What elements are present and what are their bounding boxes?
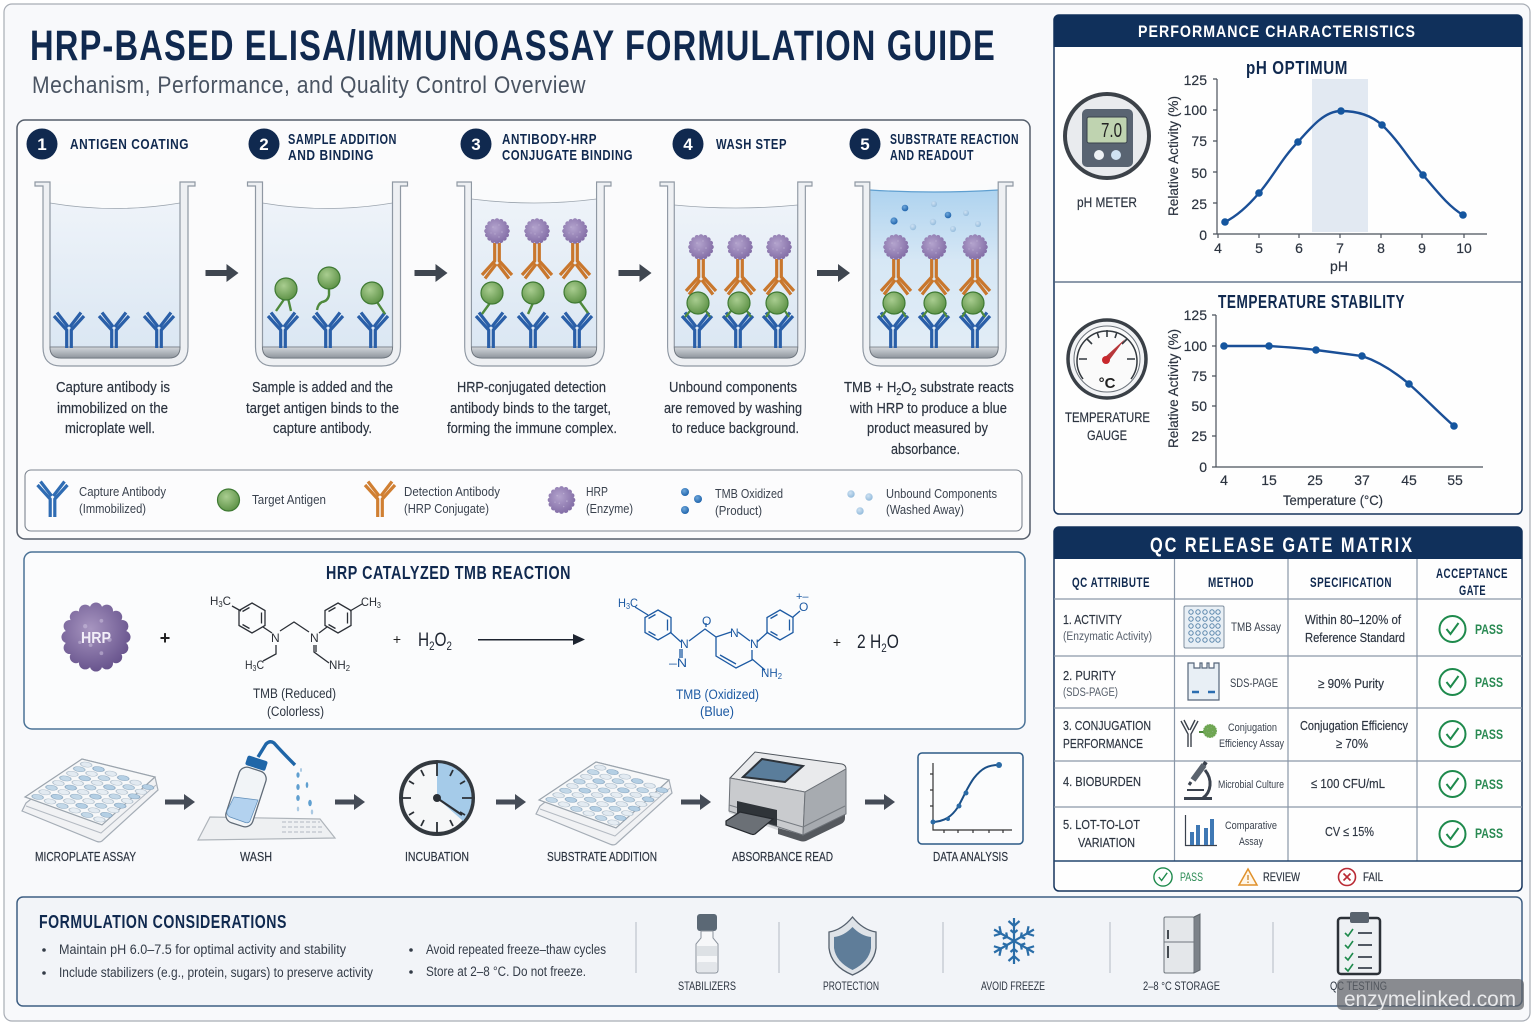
step 2 heading: 2 xyxy=(259,135,269,154)
row 2: purity: 2. PURITY xyxy=(1063,668,1116,683)
icon: stabilizers vial: STABILIZERS xyxy=(678,981,736,993)
panel: assay steps xyxy=(17,120,1030,539)
label: TMB reduced xyxy=(253,686,336,719)
chart: temperature stability: 75 xyxy=(1191,368,1207,384)
HRP enzyme: HRP xyxy=(81,630,111,647)
step 1 heading: 1 xyxy=(37,135,47,154)
chart: pH optimum: 100 xyxy=(1184,102,1207,118)
step 4 description: Unbound components xyxy=(669,379,797,396)
arrow xyxy=(335,794,365,810)
step 1 heading xyxy=(26,128,189,160)
row 1: activity: Reference Standard xyxy=(1305,630,1405,645)
step 1 description: immobilized on the xyxy=(57,400,168,417)
water product: 2 xyxy=(881,642,887,655)
icon: QC testing clipboard xyxy=(1330,912,1387,993)
workflow: data analysis chart xyxy=(918,753,1023,864)
molecule: TMB oxidized: –N xyxy=(669,656,687,670)
plus sign: + xyxy=(160,628,170,648)
column headers: SPECIFICATION xyxy=(1310,575,1392,590)
step 3 heading: CONJUGATE BINDING xyxy=(502,147,633,164)
row 5: lot-to-lot variation xyxy=(1063,815,1503,850)
step 5 heading xyxy=(850,128,1019,164)
icon: avoid freeze snowflake xyxy=(981,918,1045,993)
row 1: activity: TMB Assay xyxy=(1231,620,1281,634)
row 2: purity: SDS-PAGE xyxy=(1230,676,1278,690)
icon: pH meter: pH METER xyxy=(1077,194,1137,210)
row 1: activity: 1. ACTIVITY xyxy=(1063,612,1122,627)
plus sign: + xyxy=(833,634,841,650)
row 4: bioburden: PASS xyxy=(1475,777,1503,792)
molecule: TMB oxidized: N xyxy=(750,637,759,651)
icon: 2-8 C storage fridge xyxy=(1143,914,1220,993)
step 5 description: absorbance. xyxy=(891,441,960,458)
bullet list right: Avoid repeated freeze–thaw cycles xyxy=(426,942,606,957)
row 4: bioburden: 4. BIOBURDEN xyxy=(1063,774,1141,789)
formulation heading: FORMULATION CONSIDERATIONS xyxy=(39,912,287,932)
step 4 description: are removed by washing xyxy=(664,400,802,417)
column headers xyxy=(1072,566,1508,598)
legend: target antigen: Target Antigen xyxy=(252,493,326,507)
molecule: TMB oxidized: O xyxy=(702,614,711,628)
arrow: step 2 to 3 xyxy=(414,264,448,282)
step 2 description: Sample is added and the xyxy=(252,379,393,396)
arrow xyxy=(165,794,195,810)
bullet list left xyxy=(42,942,373,980)
well 5: substrate readout xyxy=(855,182,1013,366)
step 5 description xyxy=(844,378,1014,458)
icon: temperature gauge: TEMPERATURE xyxy=(1065,409,1150,425)
chart: temperature stability: Temperature (°C) xyxy=(1283,492,1383,508)
step 1 description: microplate well. xyxy=(65,420,155,437)
step 5 description: substrate reacts xyxy=(916,378,1014,395)
icon: pH meter xyxy=(1065,94,1149,210)
molecule: TMB reduced: 2 xyxy=(346,664,351,673)
legend: unbound components xyxy=(847,487,997,517)
icon: QC testing clipboard: QC TESTING xyxy=(1330,981,1387,993)
row 1: activity: Within 80–120% of xyxy=(1305,612,1401,627)
chart: temperature stability: 55 xyxy=(1447,472,1463,488)
column headers: METHOD xyxy=(1208,575,1254,590)
chart: pH optimum: 50 xyxy=(1191,165,1207,181)
workflow: incubation clock xyxy=(401,762,473,864)
molecule: TMB oxidized xyxy=(618,591,809,681)
label: TMB oxidized xyxy=(676,687,759,719)
chart: pH optimum: 25 xyxy=(1191,196,1207,212)
title: HRP-BASED ELISA/IMMUNOASSAY FORMULATION GUIDE xyxy=(30,22,996,70)
workflow: wash: WASH xyxy=(240,849,272,864)
reaction arrow xyxy=(478,634,585,645)
legend: HRP enzyme: HRP xyxy=(586,485,608,499)
legend: detection antibody xyxy=(365,482,501,517)
arrow: step 1 to 2 xyxy=(206,264,238,282)
row 3: conjugation performance: ≥ 70% xyxy=(1336,736,1368,751)
step 5 heading: SUBSTRATE REACTION xyxy=(890,131,1019,148)
workflow: absorbance plate reader xyxy=(726,752,846,864)
chart: temperature stability: TEMPERATURE STABILITY xyxy=(1218,292,1405,312)
molecule: TMB reduced: CH xyxy=(361,595,378,609)
hydrogen peroxide: 2 xyxy=(446,640,452,653)
arrow xyxy=(681,794,711,810)
chart: temperature stability: 25 xyxy=(1191,428,1207,444)
workflow: incubation clock: INCUBATION xyxy=(405,849,469,864)
water product: 2 H xyxy=(857,631,881,652)
bullet list right: Store at 2–8 °C. Do not freeze. xyxy=(426,964,586,979)
row 5: lot-to-lot variation: CV ≤ 15% xyxy=(1325,824,1374,839)
workflow: microplate assay: MICROPLATE ASSAY xyxy=(35,849,136,864)
step 2 heading: AND BINDING xyxy=(288,147,374,164)
legend: capture antibody: (Immobilized) xyxy=(79,502,146,516)
molecule: TMB oxidized: +– xyxy=(796,591,809,603)
row 3: conjugation performance: Efficiency Assay xyxy=(1219,738,1284,750)
chart: temperature stability: 125 xyxy=(1184,307,1207,323)
row 2: purity: PASS xyxy=(1475,675,1503,690)
molecule: TMB reduced: 3 xyxy=(253,664,257,673)
legend: HRP enzyme xyxy=(548,485,633,516)
step 2 heading: SAMPLE ADDITION xyxy=(288,131,397,148)
chart: pH optimum: 5 xyxy=(1255,240,1263,256)
step 3 heading: 3 xyxy=(471,135,481,154)
column headers: ACCEPTANCE xyxy=(1436,566,1508,581)
step 4 description: to reduce background. xyxy=(672,420,799,437)
column headers: QC ATTRIBUTE xyxy=(1072,575,1150,590)
molecule: TMB reduced: N xyxy=(310,631,319,645)
subtitle: Mechanism, Performance, and Quality Control Overview xyxy=(32,72,586,99)
molecule: TMB oxidized: N xyxy=(730,626,739,640)
row 5: lot-to-lot variation: VARIATION xyxy=(1078,835,1135,850)
row 3: conjugation performance: 3. CONJUGATION xyxy=(1063,718,1151,733)
icon: temperature gauge xyxy=(1065,320,1150,443)
molecule: TMB reduced: C xyxy=(256,658,264,672)
column headers: GATE xyxy=(1459,583,1486,598)
bullet list right xyxy=(409,942,606,979)
step 2 description: capture antibody. xyxy=(273,420,372,437)
step 3 heading: ANTIBODY-HRP xyxy=(502,131,597,148)
step 3 description xyxy=(447,379,617,437)
workflow: substrate addition: SUBSTRATE ADDITION xyxy=(547,849,657,864)
step 4 heading xyxy=(672,128,787,160)
chart: pH optimum: pH OPTIMUM xyxy=(1246,58,1348,78)
chart: pH optimum xyxy=(1166,58,1487,274)
legend: target antigen xyxy=(218,489,326,511)
molecule: TMB oxidized: H xyxy=(618,596,627,610)
row 5: lot-to-lot variation: 5. LOT-TO-LOT xyxy=(1063,817,1140,832)
watermark xyxy=(1337,979,1524,1011)
status legend: REVIEW xyxy=(1263,870,1301,884)
row 5: lot-to-lot variation: Assay xyxy=(1239,836,1263,848)
arrow: step 4 to 5 xyxy=(817,264,850,282)
row 3: conjugation performance: Conjugation Efficiency xyxy=(1300,718,1408,733)
legend: TMB oxidized: (Product) xyxy=(715,504,762,518)
legend: detection antibody: (HRP Conjugate) xyxy=(404,502,489,516)
panel header: PERFORMANCE CHARACTERISTICS xyxy=(1138,22,1416,41)
molecule: TMB oxidized: O xyxy=(799,600,808,614)
row 4: bioburden xyxy=(1063,762,1503,798)
chart: pH optimum: 9 xyxy=(1418,240,1426,256)
molecule: TMB reduced: H xyxy=(245,658,254,672)
well 1: antigen coating xyxy=(35,182,195,366)
chart: temperature stability: 100 xyxy=(1184,338,1207,354)
reaction heading: HRP CATALYZED TMB REACTION xyxy=(326,563,571,583)
row 5: lot-to-lot variation: Comparative xyxy=(1225,820,1277,832)
hydrogen peroxide: O xyxy=(435,628,446,650)
step 4 description xyxy=(664,379,802,437)
hydrogen peroxide: 2 xyxy=(429,640,435,653)
chart: pH optimum: 8 xyxy=(1377,240,1385,256)
workflow: substrate addition xyxy=(536,762,672,864)
step 3 heading xyxy=(460,128,633,164)
chart: temperature stability: 4 xyxy=(1220,472,1228,488)
panel: formulation considerations xyxy=(17,897,1522,1006)
molecule: TMB reduced: 3 xyxy=(377,601,382,610)
step 5 description: 2 xyxy=(896,385,901,397)
water product: O xyxy=(887,631,899,652)
label: TMB reduced: (Colorless) xyxy=(267,704,324,719)
step 3 description: HRP-conjugated detection xyxy=(457,379,606,396)
molecule: TMB reduced: NH xyxy=(329,658,346,672)
chart: temperature stability: Relative Activity (%) xyxy=(1166,329,1181,448)
legend: TMB oxidized: TMB Oxidized xyxy=(715,487,783,501)
icon: temperature gauge: °C xyxy=(1099,375,1116,392)
status legend: FAIL xyxy=(1363,870,1383,884)
molecule: TMB reduced xyxy=(210,594,382,673)
molecule: TMB oxidized: 2 xyxy=(778,672,783,681)
step 4 heading: 4 xyxy=(683,135,693,154)
chart: temperature stability: 15 xyxy=(1261,472,1277,488)
workflow: data analysis chart: DATA ANALYSIS xyxy=(933,849,1008,864)
row 4: bioburden: ≤ 100 CFU/mL xyxy=(1311,776,1385,791)
row 2: purity xyxy=(1063,663,1503,700)
step 1 heading: ANTIGEN COATING xyxy=(70,136,189,153)
arrow: step 3 to 4 xyxy=(618,264,652,282)
legend: TMB oxidized xyxy=(681,487,783,518)
watermark: enzymelinked.com xyxy=(1344,988,1516,1011)
step 2 description: target antigen binds to the xyxy=(246,400,399,417)
bullet list left: Include stabilizers (e.g., protein, sugars) to preserve activity xyxy=(59,965,373,980)
step 5 description: product measured by xyxy=(867,420,988,437)
chart: temperature stability xyxy=(1166,292,1483,508)
step 3 description: antibody binds to the target, xyxy=(450,400,611,417)
chart: pH optimum: 7 xyxy=(1336,240,1344,256)
arrow xyxy=(865,794,895,810)
label: TMB reduced: TMB (Reduced) xyxy=(253,686,336,701)
molecule: TMB oxidized: N xyxy=(680,637,689,651)
step 5 description: 2 xyxy=(912,385,916,397)
row 3: conjugation performance: PASS xyxy=(1475,727,1503,742)
legend: unbound components: (Washed Away) xyxy=(886,503,964,517)
chart: pH optimum: 75 xyxy=(1191,133,1207,149)
chart: temperature stability: 0 xyxy=(1199,459,1207,475)
legend: detection antibody: Detection Antibody xyxy=(404,485,501,499)
chart: pH optimum: pH xyxy=(1330,258,1348,274)
chart: pH optimum: 10 xyxy=(1456,240,1472,256)
step 5 description: O xyxy=(901,378,912,395)
legend box xyxy=(25,470,1022,531)
well 2: sample binding xyxy=(248,182,408,366)
chart: temperature stability: 45 xyxy=(1401,472,1417,488)
row 1: activity: (Enzymatic Activity) xyxy=(1063,631,1152,643)
step 2 description xyxy=(246,379,399,437)
well 4: wash xyxy=(660,182,812,366)
well 3: conjugate binding xyxy=(457,182,611,366)
label: TMB oxidized: (Blue) xyxy=(700,704,734,719)
icon: pH meter: 7.0 xyxy=(1101,120,1122,142)
molecule: TMB oxidized: NH xyxy=(761,666,778,680)
chart: pH optimum: Relative Activity (%) xyxy=(1166,96,1181,216)
step 5 heading: 5 xyxy=(860,135,870,154)
step 1 description xyxy=(56,379,170,437)
molecule: TMB reduced: 3 xyxy=(218,600,223,609)
chart: pH optimum: 4 xyxy=(1214,240,1222,256)
molecule: TMB reduced: C xyxy=(223,594,231,608)
panel: QC release gate matrix xyxy=(1054,527,1522,891)
step 2 heading xyxy=(248,128,397,164)
label: TMB oxidized: TMB (Oxidized) xyxy=(676,687,759,702)
icon: 2-8 C storage fridge: 2–8 °C STORAGE xyxy=(1143,981,1220,993)
molecule: TMB reduced: H xyxy=(210,594,219,608)
matrix header title: QC RELEASE GATE MATRIX xyxy=(1150,534,1414,557)
workflow: wash xyxy=(198,742,335,864)
chart: temperature stability: 25 xyxy=(1307,472,1323,488)
row 4: bioburden: Microbial Culture xyxy=(1218,779,1284,791)
status legend xyxy=(1154,868,1383,886)
row 2: purity: (SDS-PAGE) xyxy=(1063,687,1118,699)
chart: pH optimum: 6 xyxy=(1295,240,1303,256)
panel: HRP catalyzed TMB reaction xyxy=(24,552,1025,729)
panel: performance characteristics xyxy=(1054,15,1522,514)
step 3 description: forming the immune complex. xyxy=(447,420,617,437)
row 5: lot-to-lot variation: PASS xyxy=(1475,826,1503,841)
chart: temperature stability: 37 xyxy=(1354,472,1370,488)
legend: unbound components: Unbound Components xyxy=(886,487,997,501)
molecule: TMB reduced: N xyxy=(271,631,280,645)
step 4 heading: WASH STEP xyxy=(716,136,787,153)
icon: avoid freeze snowflake: AVOID FREEZE xyxy=(981,981,1045,993)
step 5 description: with HRP to produce a blue xyxy=(849,400,1007,417)
step 5 heading: AND READOUT xyxy=(890,147,974,164)
icon: protection shield xyxy=(823,917,879,993)
bullet list left: Maintain pH 6.0–7.5 for optimal activity and stability xyxy=(59,942,346,957)
row 1: activity xyxy=(1063,606,1503,648)
row 2: purity: ≥ 90% Purity xyxy=(1318,676,1384,691)
molecule: TMB oxidized: 3 xyxy=(626,602,631,611)
icon: temperature gauge: GAUGE xyxy=(1087,427,1127,443)
step 1 description: Capture antibody is xyxy=(56,379,170,396)
legend: HRP enzyme: (Enzyme) xyxy=(586,502,633,516)
workflow: microplate assay xyxy=(22,759,158,864)
chart: temperature stability: 50 xyxy=(1191,398,1207,414)
arrow xyxy=(496,794,526,810)
chart: pH optimum: 0 xyxy=(1199,227,1207,243)
row 1: activity: PASS xyxy=(1475,622,1503,637)
legend: capture antibody: Capture Antibody xyxy=(79,485,167,499)
hydrogen peroxide: H xyxy=(418,628,429,650)
row 3: conjugation performance: PERFORMANCE xyxy=(1063,736,1143,751)
status legend: PASS xyxy=(1180,870,1203,884)
molecule: TMB oxidized: C xyxy=(630,596,638,610)
legend: capture antibody xyxy=(38,482,167,517)
workflow: absorbance plate reader: ABSORBANCE READ xyxy=(732,849,833,864)
HRP enzyme xyxy=(61,602,131,672)
row 3: conjugation performance xyxy=(1063,718,1503,751)
icon: protection shield: PROTECTION xyxy=(823,981,879,993)
row 3: conjugation performance: Conjugation xyxy=(1228,722,1277,734)
chart: pH optimum: 125 xyxy=(1184,72,1207,88)
icon: stabilizers vial xyxy=(678,914,736,993)
plus sign: + xyxy=(393,631,401,647)
step 5 description: TMB + H xyxy=(844,378,896,395)
